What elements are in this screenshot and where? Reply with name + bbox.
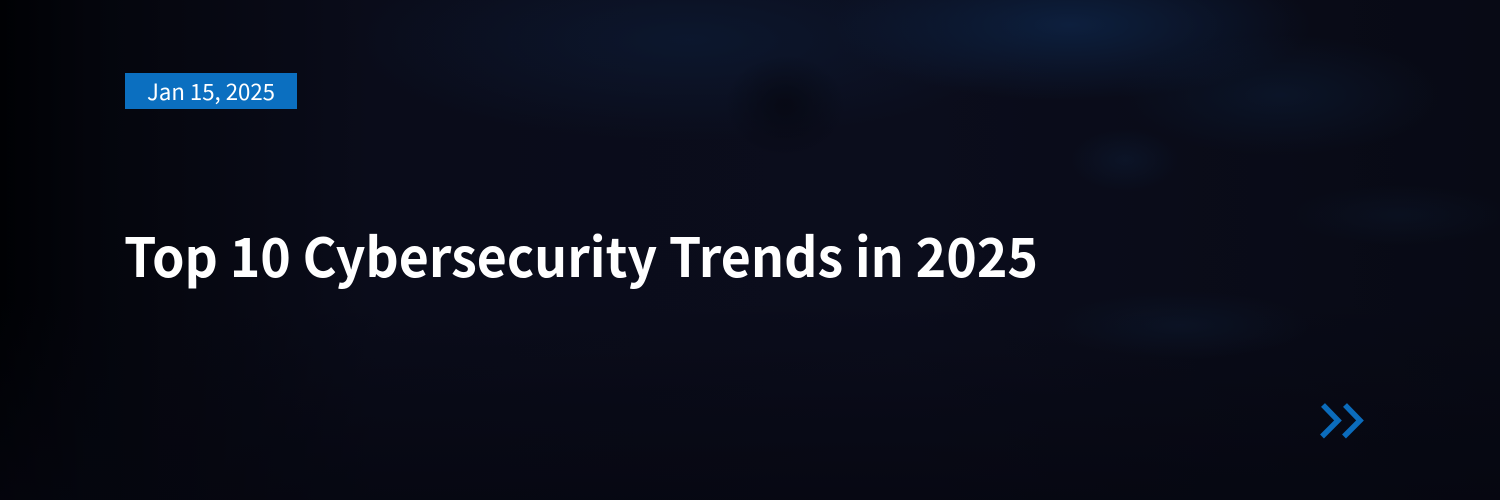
title: Top 10 Cybersecurity Trends in 2025 bbox=[124, 214, 1038, 293]
date badge bbox=[125, 73, 297, 109]
icon: double chevron arrow bbox=[1322, 405, 1360, 436]
date text: Jan 15, 2025 bbox=[147, 75, 275, 107]
